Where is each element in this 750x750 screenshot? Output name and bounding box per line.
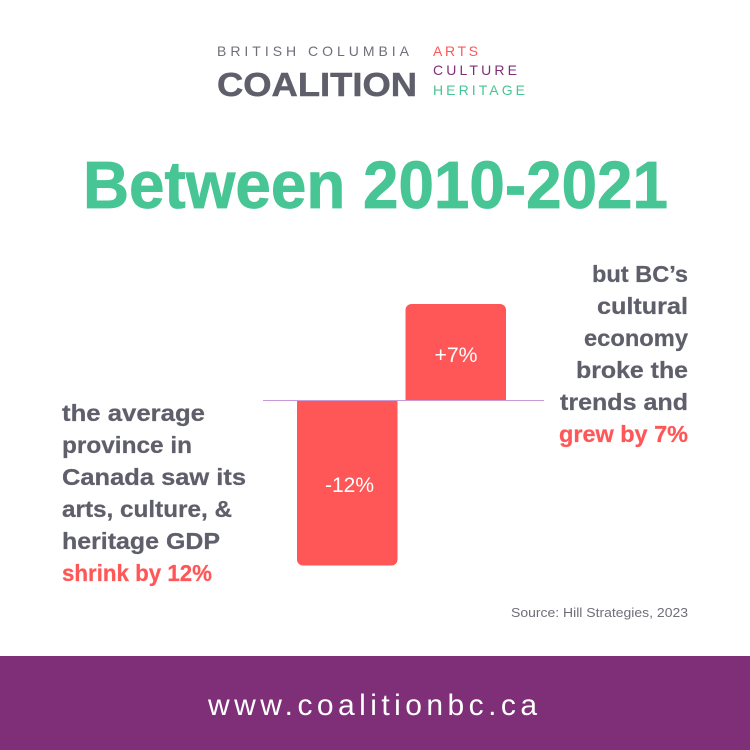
source note: Source: Hill Strategies, 2023 [511,606,688,620]
bar label: -12%: -12% [325,474,374,497]
logo text: British Columbia: BRITISH COLUMBIA [217,43,410,59]
text block: left, average province: heritage GDP [62,528,220,554]
footer banner [0,656,750,750]
title: Between 2010-2021 [83,148,668,223]
website url: www.coalitionbc.ca [207,689,537,722]
text block: left, average province: province in [62,432,192,458]
logo text: Heritage: HERITAGE [433,82,525,98]
bar: average province -12% [297,400,398,566]
text block: right, BC's cultural economy [559,261,688,447]
text block: right, BC's cultural economy: cultural [597,293,688,319]
text block: right, BC's cultural economy: but BC’s [592,261,688,287]
text block: right, BC's cultural economy: grew by 7% [559,421,688,447]
bar: BC +7% [406,304,506,400]
bar label: +7%: +7% [434,344,478,367]
text block: left, average province: the average [62,400,205,426]
text block: right, BC's cultural economy: economy [584,325,688,351]
logo text: Arts: ARTS [433,43,478,59]
text block: right, BC's cultural economy: broke the [576,357,688,383]
text block: left, average province [62,400,246,586]
logo text: Culture: CULTURE [433,62,517,78]
text block: left, average province: shrink by 12% [62,560,212,586]
axis line [263,400,544,401]
logo text: Coalition: COALITION [217,66,417,103]
text block: left, average province: arts, culture, & [62,496,232,522]
text block: left, average province: Canada saw its [62,464,246,490]
bar chart [263,304,544,566]
logo: BC Coalition for Arts, Culture, Heritage [217,43,525,103]
text block: right, BC's cultural economy: trends and [560,389,688,415]
